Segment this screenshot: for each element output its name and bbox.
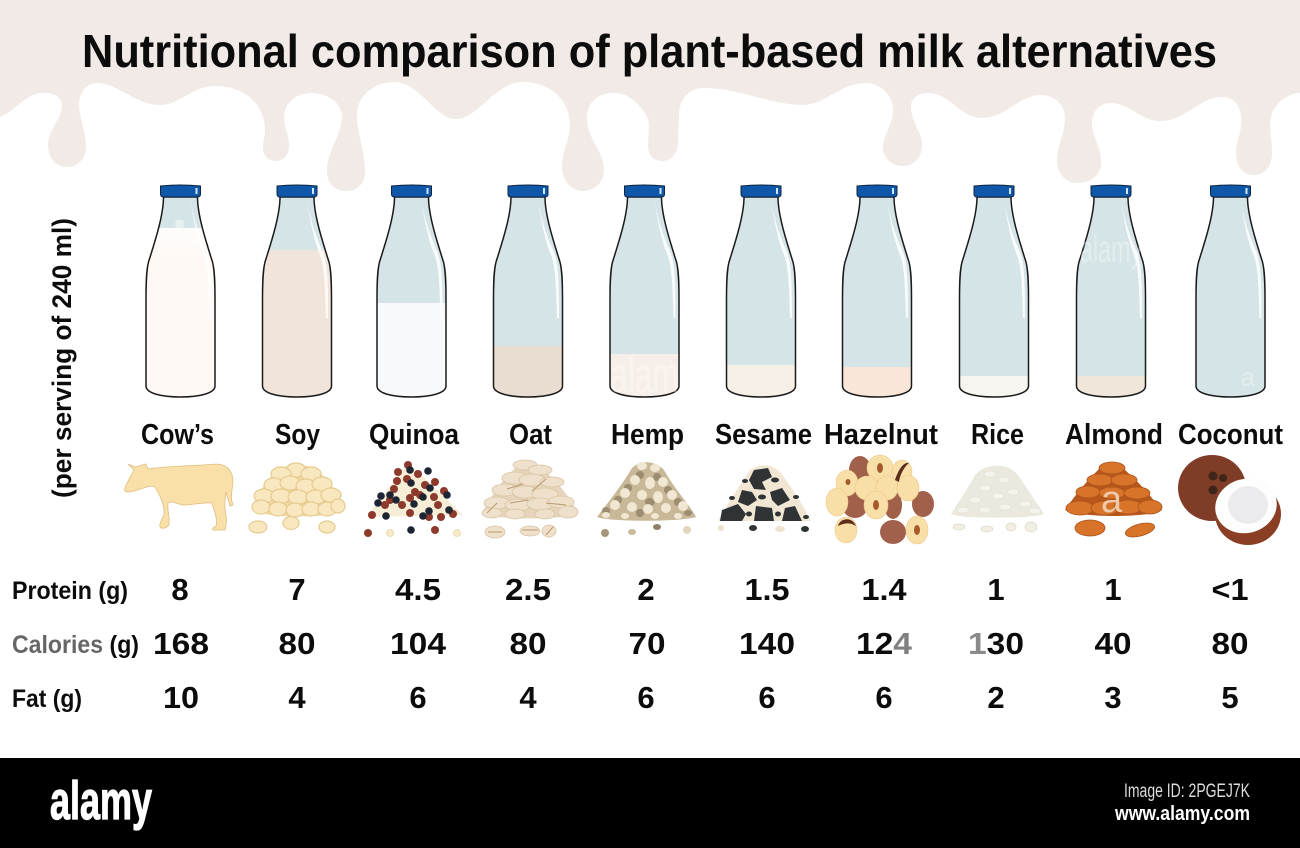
- fat values: 4: [519, 680, 537, 715]
- bottle: sesame milk: [726, 184, 796, 398]
- milk type labels: Quinoa: [369, 419, 460, 451]
- milk type labels: Soy: [275, 419, 320, 451]
- row label: protein: Protein (g): [12, 577, 128, 605]
- calories values: [153, 626, 1248, 661]
- icon: quinoa: [364, 461, 463, 537]
- calories values: 104: [390, 626, 447, 661]
- milk type labels: Almond: [1065, 419, 1163, 451]
- milk type labels: Rice: [971, 419, 1024, 451]
- bottle: hemp milk: [609, 184, 680, 398]
- fat values: 6: [409, 680, 427, 715]
- calories values: 80: [510, 626, 546, 661]
- bottle: hazelnut milk: [842, 184, 912, 398]
- bottle: almond milk: alamy: [1080, 229, 1142, 271]
- row label: calories: Calories (g): [12, 631, 139, 659]
- calories values: 40: [1094, 626, 1132, 661]
- fat values: 4: [288, 680, 306, 715]
- icon: hazelnuts: [826, 455, 934, 544]
- milk type labels: Sesame: [715, 419, 812, 451]
- protein values: 1.5: [744, 572, 790, 607]
- footer url: www.alamy.com: [1114, 803, 1250, 825]
- icon: almonds: [1065, 462, 1162, 540]
- bottle: coconut milk: a: [1240, 362, 1256, 392]
- calories values: 80: [1212, 626, 1248, 661]
- fat values: [163, 680, 1239, 715]
- calories values: 130: [968, 626, 1024, 661]
- icon: almonds: a: [1101, 479, 1123, 521]
- row label: fat: Fat (g): [12, 685, 82, 713]
- calories values: 140: [739, 626, 795, 661]
- icon: coconut: [1178, 455, 1283, 545]
- protein values: 1: [987, 572, 1005, 607]
- protein values: 1.4: [862, 572, 907, 607]
- bottle: rice milk: [958, 184, 1030, 398]
- icon: soybeans: [249, 463, 345, 533]
- milk type labels: Hazelnut: [824, 419, 938, 451]
- protein values: 1: [1104, 572, 1122, 607]
- icon: oats: [482, 460, 578, 538]
- bottle: quinoa milk: [376, 184, 447, 398]
- footer bar: [0, 758, 1300, 848]
- milk type labels: Cow’s: [141, 419, 214, 451]
- icon: hemp seeds: [597, 462, 696, 537]
- dripping milk banner: [0, 0, 1300, 191]
- title: Nutritional comparison of plant-based milk alternatives: [82, 25, 1217, 77]
- fat values: 6: [875, 680, 893, 715]
- bottle: soy milk: [262, 184, 332, 398]
- axis note: per serving: (per serving of 240 ml): [47, 218, 77, 498]
- milk type labels: [141, 419, 1283, 451]
- bottle: hemp milk: alam: [610, 347, 678, 403]
- fat values: 6: [637, 680, 655, 715]
- milk type labels: Hemp: [611, 419, 684, 451]
- fat values: 6: [758, 680, 776, 715]
- icon: cow: [125, 464, 233, 530]
- bottle: almond milk: [1076, 184, 1146, 398]
- calories values: 80: [278, 626, 316, 661]
- milk type labels: Oat: [509, 419, 552, 451]
- protein values: <1: [1212, 572, 1248, 607]
- bottle: coconut milk: [1195, 184, 1266, 398]
- protein values: 7: [288, 572, 306, 607]
- protein values: 4.5: [395, 572, 441, 607]
- icon: sesame seeds: [718, 465, 811, 532]
- calories values: 124: [856, 626, 913, 661]
- protein values: 2.5: [505, 572, 551, 607]
- fat values: 10: [163, 680, 199, 715]
- protein values: [171, 572, 1248, 607]
- bottle: cow's milk: [145, 184, 216, 398]
- fat values: 3: [1104, 680, 1122, 715]
- footer logo: alamy: [50, 771, 152, 831]
- fat values: 2: [987, 680, 1005, 715]
- protein values: 2: [637, 572, 655, 607]
- calories values: 70: [628, 626, 666, 661]
- calories values: 168: [153, 626, 209, 661]
- fat values: 5: [1221, 680, 1239, 715]
- icon: rice: [951, 466, 1044, 532]
- footer image id: Image ID: 2PGEJ7K: [1124, 781, 1250, 802]
- protein values: 8: [171, 572, 189, 607]
- bottle: oat milk: [492, 184, 564, 398]
- milk type labels: Coconut: [1178, 419, 1283, 451]
